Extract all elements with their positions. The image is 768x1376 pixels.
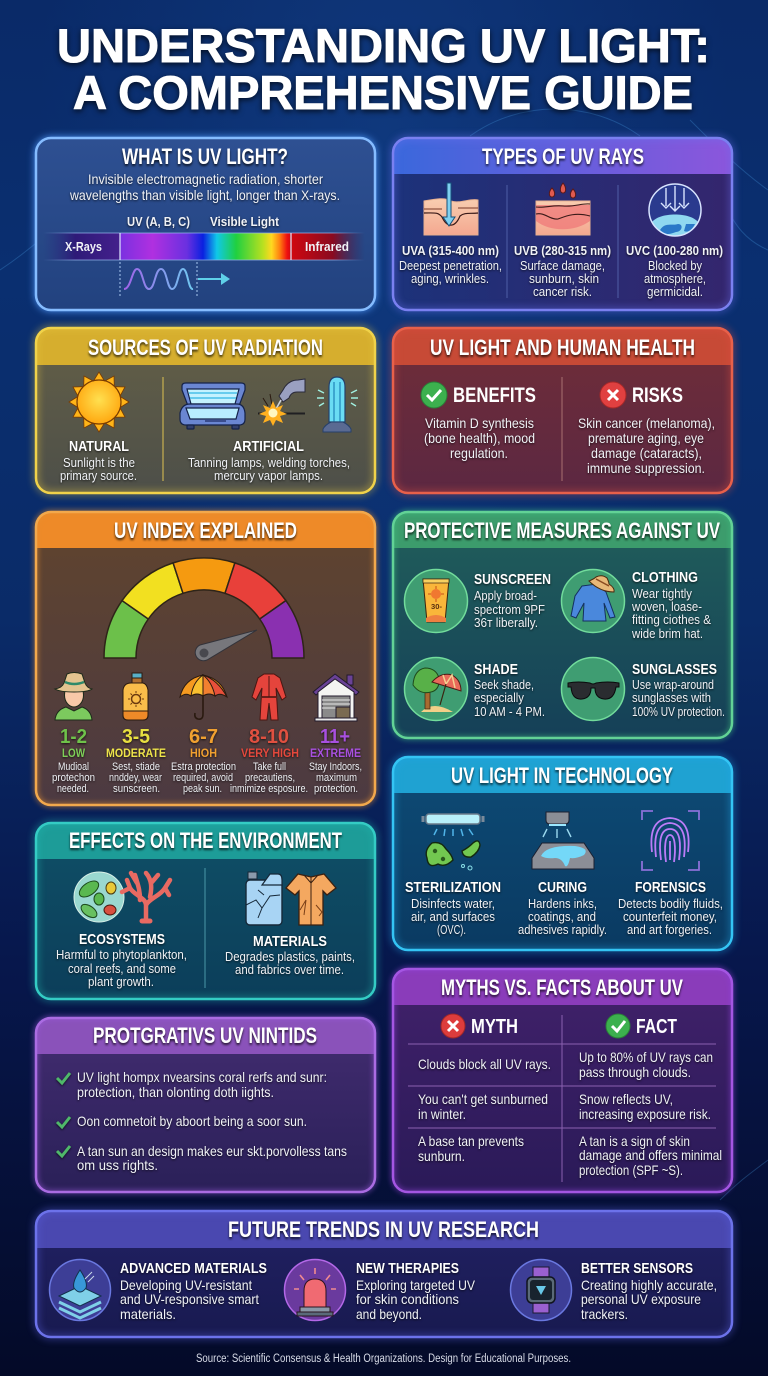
range: moderate: sunscreen. xyxy=(113,783,160,795)
sunscreen text: 36т liberally. xyxy=(474,615,538,630)
future text: new therapies xyxy=(356,1260,476,1322)
range: extreme: 11+ xyxy=(320,726,350,748)
benefits text xyxy=(424,415,535,461)
icon: coral xyxy=(122,873,170,921)
range: moderate: Sest, stiade xyxy=(112,761,160,773)
electromagnetic spectrum bar xyxy=(43,233,365,260)
fact statements: protection (SPF ~S). xyxy=(579,1162,683,1178)
clothing text: woven, loase- xyxy=(631,599,702,614)
note two: Oon comnetoit by aboort being a soor sun. xyxy=(77,1113,307,1129)
risks heading with x icon xyxy=(600,382,683,408)
spectrum labels: Visible Light xyxy=(210,214,280,229)
future text: better sensors: Creating highly accurate, xyxy=(581,1277,717,1293)
forensics text: and art forgeries. xyxy=(627,922,712,937)
definition text: Invisible electromagnetic radiation, shorter xyxy=(88,171,323,187)
range: high xyxy=(171,726,236,795)
source footer: Source: Scientific Consensus & Health Organizations. Design for Educational Purposes. xyxy=(196,1353,571,1365)
benefits text: (bone health), mood xyxy=(424,430,535,446)
UVA text: Deepest penetration, xyxy=(399,258,502,273)
heading: sources: SOURCES OF UV RADIATION xyxy=(88,335,323,360)
clothing text xyxy=(631,569,711,641)
fact statements: Up to 80% of UV rays can xyxy=(579,1049,713,1065)
sterilization text: Disinfects water, xyxy=(411,896,495,911)
forensics text: Detects bodily fluids, xyxy=(618,896,723,911)
icon: full protective suit xyxy=(252,674,286,720)
icon: UVA skin penetration xyxy=(424,183,478,235)
panel: what is UV light xyxy=(36,138,375,310)
myth statements: Clouds block all UV rays. xyxy=(418,1056,551,1072)
risks text: immune suppression. xyxy=(587,460,705,476)
icon: umbrella xyxy=(180,675,227,719)
sterilization text: (OVC). xyxy=(437,922,466,937)
UVC text: atmosphere, xyxy=(644,271,706,286)
risks text: Skin cancer (melanoma), xyxy=(578,415,715,431)
artificial source text: Tanning lamps, welding torches, xyxy=(188,455,350,470)
fact heading with check icon xyxy=(606,1014,677,1038)
sunscreen text: spectrom 9PF xyxy=(474,602,545,617)
panel: sources of UV radiation xyxy=(36,328,375,493)
definition text xyxy=(69,171,340,203)
future text: new therapies: and beyond. xyxy=(356,1306,422,1322)
heading: health: UV LIGHT AND HUMAN HEALTH xyxy=(430,335,695,360)
wavelength wave and arrow xyxy=(120,262,230,296)
risks text xyxy=(578,415,715,476)
myth statements: You can't get sunburned xyxy=(418,1091,548,1107)
panel: UV light and human health xyxy=(393,328,732,493)
risks text: damage (cataracts), xyxy=(591,445,702,461)
panel: myths vs facts xyxy=(393,969,732,1192)
range: extreme: maximum xyxy=(316,772,357,784)
ecosystems text: Harmful to phytoplankton, xyxy=(56,947,187,962)
gauge needle xyxy=(195,630,257,661)
heading: protective notes: PROTGRATIVS UV NINTIDS xyxy=(93,1023,317,1048)
panel: UV light in technology xyxy=(393,757,732,950)
icon: advanced materials layers xyxy=(50,1260,110,1320)
range: extreme xyxy=(309,726,362,795)
UVB text: UVB (280-315 nm) xyxy=(514,243,611,258)
heading: myths vs facts: MYTHS VS. FACTS ABOUT UV xyxy=(441,975,683,1000)
sunglasses text: Use wrap-around xyxy=(632,677,714,692)
electromagnetic spectrum bar: Infrared xyxy=(305,239,349,254)
panel: UV index explained xyxy=(36,512,375,805)
range: low xyxy=(52,726,95,795)
icon: welding torch xyxy=(258,379,305,426)
panel: effects on the environment xyxy=(36,823,375,999)
heading: UV index: UV INDEX EXPLAINED xyxy=(114,518,297,543)
heading: future trends: FUTURE TRENDS IN UV RESEARCH xyxy=(228,1217,539,1242)
future text: better sensors: trackers. xyxy=(581,1306,628,1322)
curing text: adhesives rapidly. xyxy=(518,922,607,937)
UVA text xyxy=(399,243,502,286)
UVB text xyxy=(514,243,611,299)
future text: advanced materials: Developing UV-resistant xyxy=(120,1277,252,1293)
range: low: Mudioal xyxy=(58,761,89,773)
panel: types of UV rays xyxy=(393,138,732,310)
icon: long sleeve shirt and hat xyxy=(562,570,624,632)
range: very high: inmimize esposure. xyxy=(230,783,308,795)
materials text xyxy=(225,933,355,977)
icon: tree and beach umbrella xyxy=(404,658,468,720)
range: very high: VERY HIGH xyxy=(241,746,299,760)
curing text xyxy=(518,879,607,937)
range: high: 6-7 xyxy=(189,726,218,748)
icon: sunscreen tube: 30- xyxy=(431,604,443,611)
ecosystems text xyxy=(56,931,187,989)
myth heading with x icon: MYTH xyxy=(471,1016,518,1038)
spectrum labels: UV (A, B, C) xyxy=(127,214,190,229)
heading: types of UV rays: TYPES OF UV RAYS xyxy=(482,144,644,169)
materials text: MATERIALS xyxy=(253,933,327,950)
ecosystems text: coral reefs, and some xyxy=(68,961,176,976)
fact statements: A tan is a sign of skin xyxy=(579,1133,690,1149)
panel: protective UV notes xyxy=(36,1018,375,1192)
note three: om uss rights. xyxy=(77,1157,158,1173)
sterilization text: STERILIZATION xyxy=(405,879,501,896)
title xyxy=(57,19,710,119)
future text: new therapies: for skin conditions xyxy=(356,1291,459,1307)
UVC text: Blocked by xyxy=(648,258,702,273)
range: moderate xyxy=(106,726,166,795)
spectrum labels xyxy=(127,214,280,229)
range: moderate: 3-5 xyxy=(122,726,150,748)
myth statements: in winter. xyxy=(418,1106,466,1122)
ecosystems text: plant growth. xyxy=(88,974,154,989)
icon: mercury vapor lamp xyxy=(317,377,358,432)
artificial source text: ARTIFICIAL xyxy=(233,438,304,455)
forensics text xyxy=(618,879,723,937)
clothing text: fitting ciothes & xyxy=(632,612,711,627)
range: very high xyxy=(230,726,308,795)
shade text xyxy=(474,661,545,719)
title: UNDERSTANDING UV LIGHT: xyxy=(57,19,710,72)
gauge: UV index xyxy=(104,558,304,658)
future text: advanced materials: ADVANCED MATERIALS xyxy=(120,1260,267,1277)
panel: protective measures xyxy=(393,512,732,738)
electromagnetic spectrum bar: X-Rays xyxy=(65,239,102,254)
UVB text: sunburn, skin xyxy=(529,271,599,286)
future text: advanced materials: materials. xyxy=(120,1306,176,1322)
future text: better sensors: BETTER SENSORS xyxy=(581,1260,693,1277)
clothing text: Wear tightly xyxy=(632,586,692,601)
fact statements: Snow reflects UV, xyxy=(579,1091,673,1107)
artificial source text: mercury vapor lamps. xyxy=(214,468,323,483)
range: very high: precautiens, xyxy=(245,772,295,784)
fact statements: damage and offers minimal xyxy=(579,1147,722,1163)
note three xyxy=(57,1143,347,1173)
curing text: Hardens inks, xyxy=(528,896,597,911)
ecosystems text: ECOSYSTEMS xyxy=(79,931,165,948)
icon: phytoplankton xyxy=(74,872,124,922)
shade text: SHADE xyxy=(474,661,518,678)
sterilization text xyxy=(405,879,501,937)
range: low: 1-2 xyxy=(60,726,87,748)
UVA text: aging, wrinkles. xyxy=(411,271,489,286)
note three: A tan sun an design makes eur skt.porvolless tans xyxy=(77,1143,347,1159)
fact statements: pass through clouds. xyxy=(579,1064,691,1080)
clothing text: wide brim hat. xyxy=(631,626,703,641)
UVC text: UVC (100-280 nm) xyxy=(626,243,723,258)
myth statements xyxy=(418,1056,551,1164)
artificial source text xyxy=(188,438,350,483)
natural source text: NATURAL xyxy=(69,438,129,455)
sunglasses text: 100% UV protection. xyxy=(632,704,725,719)
title: A COMPREHENSIVE GUIDE xyxy=(73,66,693,119)
icon: person with hat xyxy=(55,672,92,720)
UVC text: germicidal. xyxy=(647,284,703,299)
forensics text: FORENSICS xyxy=(635,879,706,896)
forensics text: counterfeit money, xyxy=(623,909,717,924)
future text: better sensors: personal UV exposure xyxy=(581,1291,701,1307)
sunglasses text xyxy=(632,661,725,719)
icon: cracked plastic jug xyxy=(246,872,282,925)
icon: faded shirt xyxy=(286,874,336,925)
sunscreen text: Apply broad- xyxy=(474,588,537,603)
materials text: Degrades plastics, paints, xyxy=(225,949,355,964)
range: moderate: MODERATE xyxy=(106,746,166,760)
sunglasses text: SUNGLASSES xyxy=(632,661,717,678)
fact statements xyxy=(579,1049,722,1178)
icon: fingerprint scan xyxy=(642,811,699,870)
icon: sun xyxy=(69,372,129,432)
range: low: needed. xyxy=(57,783,89,795)
curing text: CURING xyxy=(538,879,587,896)
natural source text: primary source. xyxy=(60,468,137,483)
range: high: required, avoid xyxy=(173,772,233,784)
shade text: Seek shade, xyxy=(474,677,534,692)
natural source text: Sunlight is the xyxy=(63,455,135,470)
materials text: and fabrics over time. xyxy=(235,962,344,977)
range: high: Estra protection xyxy=(171,761,236,773)
shade text: especially xyxy=(474,690,524,705)
note one xyxy=(57,1069,327,1100)
future text: better sensors xyxy=(581,1260,717,1322)
range: low: protechon xyxy=(52,772,95,784)
risks text: premature aging, eye xyxy=(588,430,704,446)
heading: what is UV light: WHAT IS UV LIGHT? xyxy=(122,144,288,169)
myth statements: A base tan prevents xyxy=(418,1133,524,1149)
range: moderate: nnddey, wear xyxy=(109,772,162,784)
note one: UV light hompx nvearsins coral rerfs and sunr: xyxy=(77,1069,327,1085)
range: low: LOW xyxy=(62,746,86,760)
range: extreme: Stay Indoors, xyxy=(309,761,362,773)
natural source text xyxy=(60,438,137,483)
panel: future trends xyxy=(36,1211,732,1337)
fact statements: increasing exposure risk. xyxy=(579,1106,711,1122)
benefits text: regulation. xyxy=(450,445,508,461)
risks heading with x icon: RISKS xyxy=(632,384,683,407)
benefits heading with check icon: BENEFITS xyxy=(453,384,536,407)
range: extreme: EXTREME xyxy=(310,746,361,760)
icon: tanning bed xyxy=(180,383,245,429)
fact heading with check icon: FACT xyxy=(636,1016,677,1038)
myth heading with x icon xyxy=(441,1014,518,1038)
sunscreen text: SUNSCREEN xyxy=(474,571,551,588)
sunscreen text xyxy=(474,571,551,630)
future text: advanced materials xyxy=(120,1260,267,1322)
icon: UVB sunburned skin xyxy=(536,183,590,235)
icon: germicidal lamp and germs xyxy=(423,814,483,870)
note one: protection, than olonting doth iights. xyxy=(77,1084,274,1100)
UVB text: cancer risk. xyxy=(533,284,592,299)
UVB text: Surface damage, xyxy=(520,258,605,273)
icon: therapy alarm light xyxy=(284,1260,346,1320)
curing text: coatings, and xyxy=(528,909,596,924)
definition text: wavelengths than visible light, longer than X-rays. xyxy=(69,187,340,203)
sunglasses text: sunglasses with xyxy=(632,690,711,705)
range: very high: Take full xyxy=(253,761,286,773)
icon: UVC atmosphere globe xyxy=(649,184,701,236)
benefits heading with check icon xyxy=(421,382,536,408)
icon: smart watch sensor xyxy=(510,1260,572,1320)
heading: technology: UV LIGHT IN TECHNOLOGY xyxy=(451,763,673,788)
icon: sunscreen tube xyxy=(404,570,468,632)
range: high: peak sun. xyxy=(183,783,222,795)
icon: curing lamp over resin xyxy=(532,812,594,869)
future text: new therapies: NEW THERAPIES xyxy=(356,1260,459,1277)
UVA text: UVA (315-400 nm) xyxy=(402,243,499,258)
shade text: 10 AM - 4 PM. xyxy=(474,704,545,719)
myth statements: sunburn. xyxy=(418,1148,465,1164)
icon: house xyxy=(313,674,359,721)
range: extreme: protection. xyxy=(314,783,358,795)
future text: advanced materials: and UV-responsive smart xyxy=(120,1291,259,1307)
future text: new therapies: Exploring targeted UV xyxy=(356,1277,476,1293)
benefits text: Vitamin D synthesis xyxy=(425,415,534,431)
icon: sunglasses xyxy=(562,658,624,720)
icon: sunscreen bottle xyxy=(123,673,148,720)
clothing text: CLOTHING xyxy=(632,569,698,586)
range: high: HIOH xyxy=(190,746,217,760)
UVC text xyxy=(626,243,723,299)
sterilization text: air, and surfaces xyxy=(411,909,495,924)
heading: environment: EFFECTS ON THE ENVIRONMENT xyxy=(69,828,342,853)
range: very high: 8-10 xyxy=(249,726,289,748)
